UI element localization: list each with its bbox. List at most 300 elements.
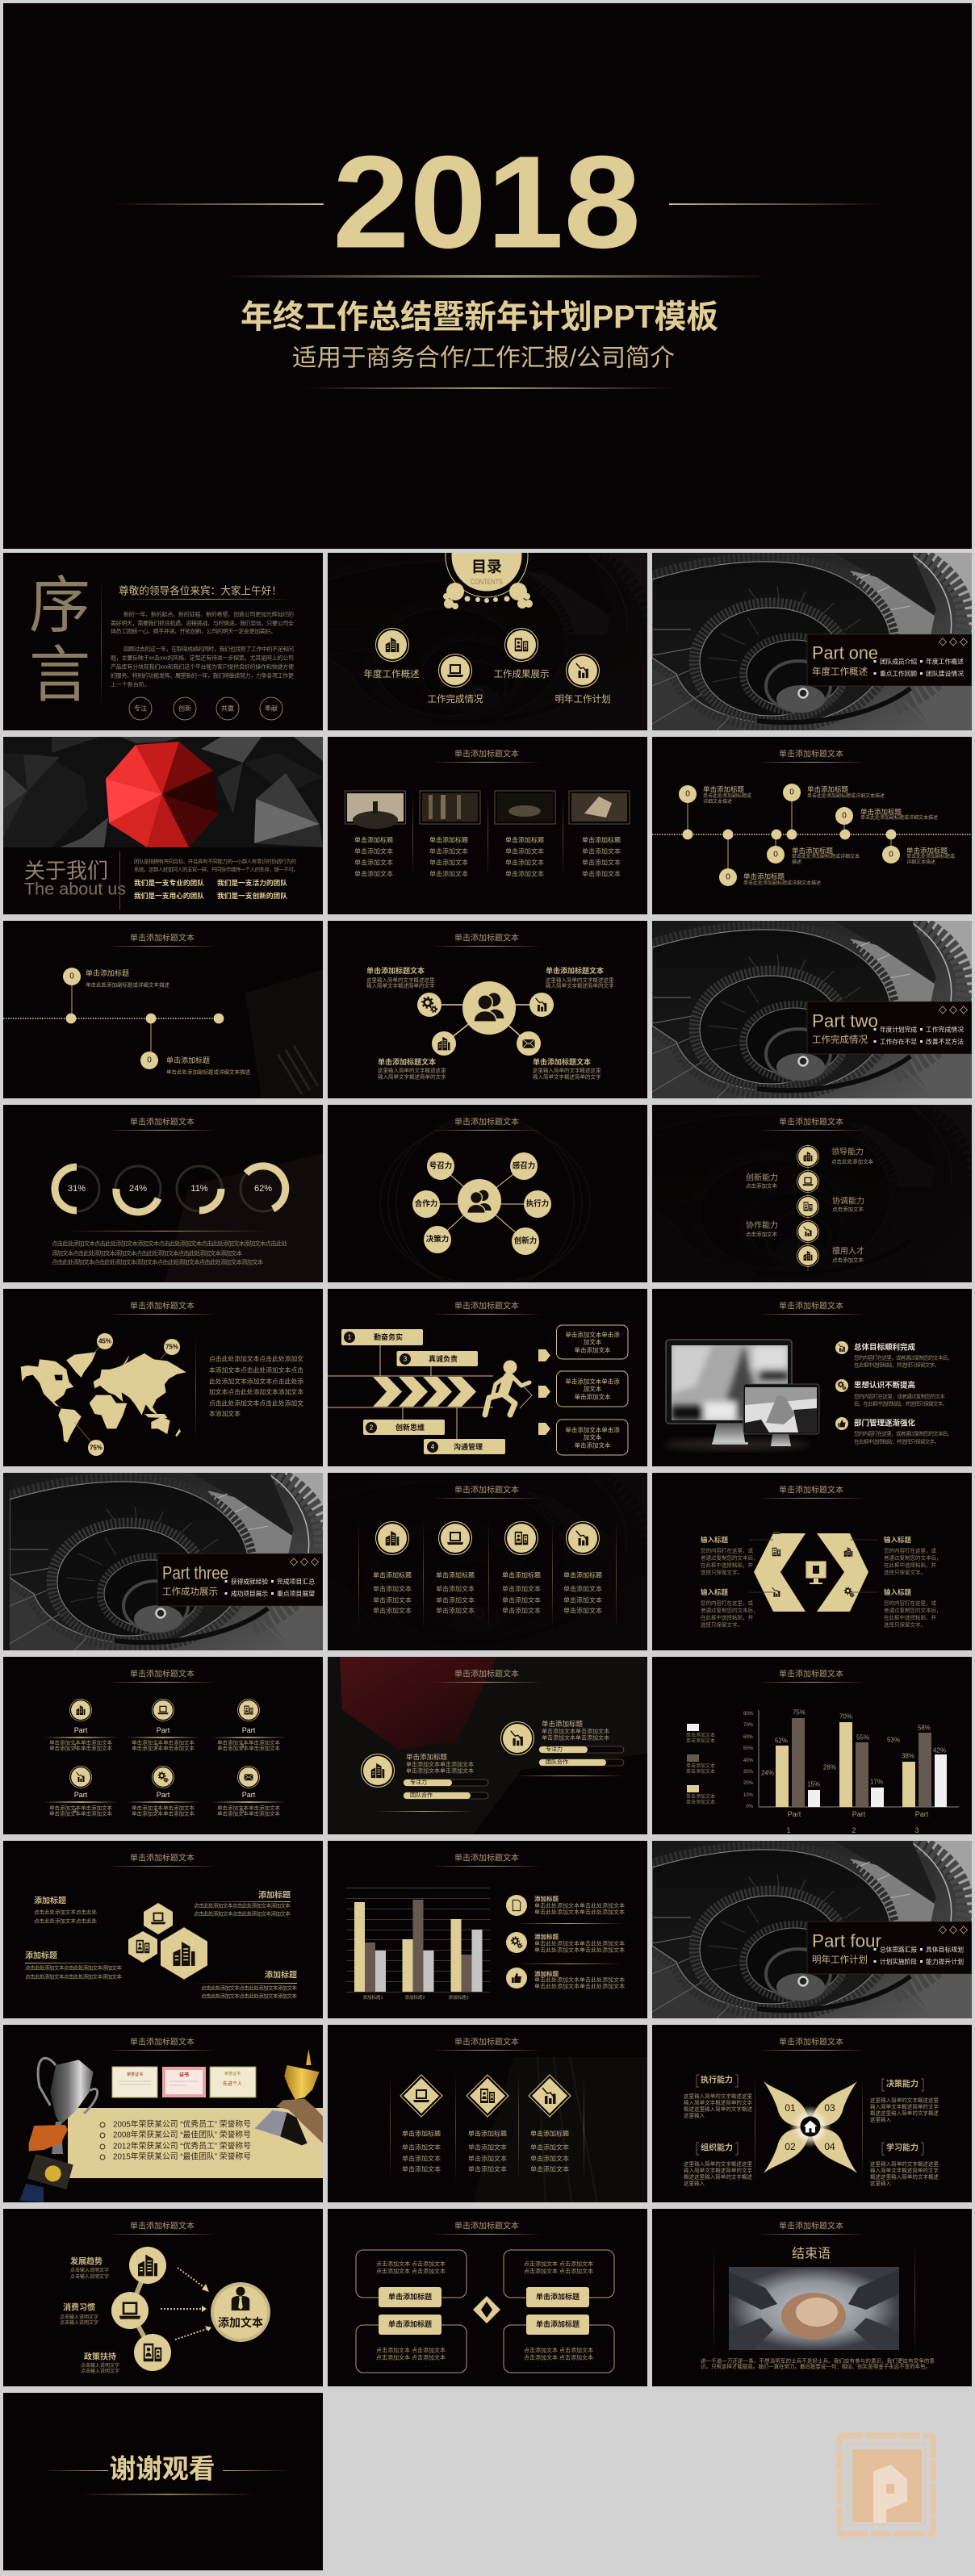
- section plate: 工作存在不足: [880, 1038, 917, 1046]
- title pills: [379, 2287, 589, 2335]
- labels: 单击添加标题文本: [378, 1057, 436, 1066]
- node badges: 0: [726, 873, 730, 881]
- section heading: 关于我们: [24, 859, 108, 883]
- item: 明年工作计划: 明年工作计划: [555, 693, 610, 705]
- title pills: 单击添加标题: [388, 2292, 432, 2301]
- heading: 单击添加标题文本: [779, 1117, 843, 1127]
- contents badge: [443, 515, 533, 609]
- ring 11%: [177, 1166, 222, 1211]
- chart: [346, 1888, 490, 1992]
- section plate: 计划实施阶段: [880, 1958, 917, 1966]
- ability labels: 点击添加文本: [746, 1181, 778, 1190]
- divider: [195, 1337, 196, 1442]
- preface text: 新的一年、新的起点、新的征程、新的希望。创造公司更加光辉灿烂的: [123, 610, 294, 618]
- left labels: 选择只保留文字。: [701, 1569, 743, 1575]
- value labels: 75%: [793, 1709, 806, 1716]
- title pills: 单击添加标题: [536, 2319, 580, 2328]
- map callouts: 75%: [165, 1343, 178, 1351]
- heading: 单击添加标题文本: [454, 933, 519, 943]
- title pills: 单击添加标题: [536, 2292, 580, 2301]
- section plate: 具体目标规划: [926, 1945, 964, 1953]
- heading: [107, 1117, 217, 1131]
- note 3: 单击此处添加文本单击此处添加文本: [534, 1976, 625, 1984]
- panel: about us: [3, 737, 323, 914]
- heading: 单击添加标题文本: [454, 1301, 519, 1311]
- factor labels: 点击输入说明文字: [70, 2273, 109, 2280]
- panel: vertical abilities: [652, 1105, 972, 1282]
- column text: 单击添加文本: [429, 870, 468, 878]
- legend: 单击添加文本: [686, 1793, 715, 1800]
- part text: 单击添加文本单击添加文本: [49, 1804, 113, 1811]
- right labels: 在此框中选择粘贴，并: [884, 1614, 936, 1620]
- ability names: 号召力: [429, 1160, 452, 1170]
- diamond icons: [400, 2075, 571, 2117]
- description: [209, 1354, 303, 1417]
- rule left: [44, 2470, 108, 2471]
- node labels: 单击此处添加副标题或详细文本描述: [743, 880, 821, 886]
- badge bottom: 单击此处添加副标题或详细文本描述: [166, 1068, 250, 1075]
- description: 点击此处添加文本点击此处添加文: [209, 1354, 303, 1362]
- right labels: 您的内容打在这里，或: [884, 1546, 936, 1554]
- arrows: [538, 1349, 550, 1435]
- teamwork photo: [729, 2267, 899, 2350]
- note 2: 单击此处添加文本单击此处添加文本: [534, 1947, 625, 1953]
- heading: 单击添加标题文本: [130, 2037, 195, 2047]
- column text: 单击添加文本: [582, 870, 621, 878]
- part text: 4: [73, 1808, 77, 1814]
- outcome boxes: 加文本: [584, 1385, 602, 1393]
- step pills: 勤奋务实: [374, 1332, 403, 1341]
- left labels: 在此框中选择粘贴，并: [701, 1561, 754, 1569]
- skill block right: 单击添加标题: [542, 1720, 584, 1728]
- monitor: [664, 1340, 810, 1451]
- panel: hexagons: [3, 1841, 323, 2018]
- spiral staircase photo: [10, 1463, 329, 1650]
- panel: bar chart with notes: [328, 1841, 647, 2018]
- ability names: [415, 1160, 549, 1246]
- node badges: 0: [685, 789, 690, 799]
- axes: 80%: [743, 1712, 754, 1717]
- heading: [107, 933, 217, 947]
- heading: 单击添加标题文本: [779, 749, 843, 759]
- label top right: 点击此处添加文本点击此处添加文本添加文本: [194, 1909, 291, 1917]
- preface text: 体员工团结一心、携手并进、开拓创新，公司的明天一定会更加美好。: [111, 628, 276, 634]
- part text: Part: [157, 1791, 170, 1799]
- award list: [100, 2119, 251, 2161]
- ability 学习能力: [870, 2142, 939, 2187]
- ability 学习能力: 输入简单文字概述简单的文字: [870, 2166, 939, 2174]
- red umbrella backdrop: [340, 1657, 497, 1750]
- box text: 点击添加文本 点击添加文本: [524, 2268, 593, 2274]
- part text: 3: [241, 1743, 245, 1750]
- ability names: 决策力: [426, 1235, 449, 1244]
- note 2: [506, 1932, 625, 1953]
- photo frames: [345, 791, 630, 829]
- node badges: 0: [789, 788, 794, 797]
- chevrons: [373, 1377, 476, 1407]
- item: 工作完成情况: [428, 654, 483, 705]
- factor labels: 消费习惯: [63, 2302, 95, 2313]
- note 1: 添加标题: [534, 1895, 559, 1903]
- feature list: [835, 1341, 952, 1445]
- feature list: 您的内容打在这里，或者通过复制您的文本后，: [854, 1354, 952, 1361]
- part text: 单击添加文本单击添加文本: [49, 1809, 113, 1817]
- part text: Part: [242, 1791, 256, 1799]
- category labels: 3: [914, 1826, 919, 1834]
- divider: [119, 851, 120, 910]
- petal numbers: 01: [785, 2102, 796, 2114]
- ring 11%: 11%: [190, 1184, 208, 1194]
- feature list: 思想认识不断提高: [854, 1380, 915, 1390]
- badges: [376, 1522, 599, 1554]
- heading: [432, 933, 542, 947]
- panel: world map: [3, 1289, 323, 1466]
- axes: 40%: [743, 1758, 754, 1763]
- badge top: [63, 968, 169, 988]
- heading: [756, 1669, 866, 1683]
- skill block right: [500, 1720, 624, 1766]
- panel: timeline six nodes: [652, 737, 972, 914]
- note 1: 单击此处添加文本单击此处添加文本: [534, 1908, 625, 1916]
- ring 24%: 24%: [129, 1184, 147, 1194]
- rules: [376, 1775, 626, 1812]
- panel: hexagon bands: [652, 1473, 972, 1650]
- linked circles: [111, 2247, 171, 2371]
- label top left: [34, 1895, 97, 1924]
- ability 组织能力: [684, 2142, 752, 2187]
- badge top: 单击添加标题: [86, 968, 129, 977]
- label bottom right: 点击此处添加文本点击此处添加文本添加文本: [201, 1984, 297, 1992]
- ability labels: 点击添加文本: [832, 1206, 864, 1212]
- ability 组织能力: 输入简单文字概述简单的文字: [684, 2166, 752, 2174]
- node labels: [703, 785, 955, 886]
- description: 点击此处添加文本点击此处添加文: [209, 1399, 303, 1407]
- column text: 单击添加文本: [436, 1585, 475, 1593]
- heading: [756, 2221, 866, 2235]
- factor labels: 点击输入说明文字: [60, 2319, 98, 2326]
- petal numbers: [785, 2102, 835, 2152]
- ring 31%: [54, 1166, 99, 1211]
- title: 2018: 2018: [333, 128, 641, 276]
- column text: 单击添加文本: [436, 1596, 475, 1604]
- silver trophy in hand: [19, 2058, 98, 2202]
- column text: 单击添加文本: [563, 1606, 602, 1614]
- petal flower: [764, 2081, 857, 2173]
- ability labels: 协调能力: [832, 1196, 864, 1206]
- map callouts: 45%: [98, 1338, 111, 1344]
- node labels: 单击此处添加副标题或: [906, 853, 955, 859]
- badge bottom: [140, 1052, 250, 1075]
- panel: runner process: [328, 1289, 647, 1466]
- value labels: 24%: [761, 1769, 774, 1777]
- column text: [373, 1570, 602, 1614]
- dividers: [358, 1521, 617, 1630]
- axes: 60%: [743, 1735, 754, 1740]
- factor labels: 政策扶持: [84, 2352, 116, 2361]
- left labels: 在此框中选择粘贴，并: [701, 1614, 754, 1620]
- bars: [776, 1718, 947, 1807]
- ability 学习能力: 概述这里输入简单的文字概述: [870, 2172, 939, 2181]
- preface text: 的服务、特别的功能发挥。展望新的一年，我们将继续努力，力争各项工作更: [111, 671, 294, 680]
- certificates: 荣誉证书: [224, 2071, 241, 2076]
- section plate: 团队成员介绍: [880, 657, 917, 665]
- chain badges: [797, 1145, 819, 1267]
- factor labels: [60, 2256, 119, 2374]
- labels: 单击添加标题文本: [546, 966, 604, 975]
- outcome boxes: 加文本: [584, 1433, 602, 1441]
- part text: 单击添加文本单击添加文本: [49, 1745, 113, 1751]
- column text: 单击添加文本: [502, 1606, 541, 1614]
- preface text: 题，主要反映于xx及xxx的风格、定型还有待进一步探索。尤其是网上的公司: [111, 654, 294, 662]
- world map: [21, 1352, 186, 1443]
- title pills: 单击添加标题: [388, 2319, 432, 2328]
- outcome boxes: [557, 1325, 628, 1455]
- preface text: [111, 610, 294, 688]
- label top right: 点击此处添加文本点击此处添加文本添加文本: [194, 1901, 291, 1909]
- value labels: 52%: [775, 1737, 788, 1745]
- note 3: 单击此处添加文本单击此处添加文本: [534, 1982, 625, 1990]
- column text: 单击添加文本: [354, 847, 393, 855]
- labels: [366, 966, 614, 1080]
- panel: awards: [3, 2025, 323, 2202]
- section plate: 工作完成情况: [812, 1034, 868, 1045]
- node labels: 单击添加标题: [703, 785, 745, 793]
- column text: 单击添加文本: [502, 1585, 541, 1593]
- column text: 单击添加标题: [468, 2129, 507, 2137]
- column text: 单击添加文本: [563, 1585, 602, 1593]
- ring 62%: [241, 1166, 286, 1211]
- column text: 单击添加标题: [582, 836, 621, 844]
- node labels: 单击此处添加副标题或详细文本: [792, 853, 860, 859]
- award list: 2015年荣获某公司 “最佳团队” 荣誉称号: [113, 2152, 251, 2161]
- heading: 单击添加标题文本: [454, 1853, 519, 1863]
- note 2: 单击此处添加文本单击此处添加文本: [534, 1940, 625, 1947]
- panel: devices: [652, 1289, 972, 1466]
- panel: progress rings: [3, 1105, 323, 1282]
- column text: [402, 2129, 569, 2172]
- section plate: Part four: [812, 1930, 881, 1951]
- dividers: [517, 1923, 622, 1964]
- part text: Part: [157, 1726, 170, 1734]
- node labels: 单击此处添加副标题或: [703, 792, 751, 799]
- about text: [134, 857, 299, 873]
- map callouts: [74, 1333, 180, 1456]
- spiral staircase photo: [652, 911, 972, 1098]
- part text: Part: [74, 1726, 88, 1734]
- outcome boxes: 单击添加文本单击添: [565, 1377, 620, 1385]
- panel: part one: [652, 553, 972, 730]
- axes: 10%: [743, 1793, 754, 1798]
- legend: 单击添加文本: [686, 1799, 715, 1805]
- left labels: 输入标题: [701, 1536, 729, 1544]
- column text: 单击添加标题: [429, 836, 468, 844]
- column text: 单击添加标题: [505, 836, 544, 844]
- node badges: 0: [842, 812, 847, 820]
- labels: 单击添加标题文本: [533, 1057, 591, 1066]
- node labels: 单击此处添加副标题或详细文本描述: [807, 792, 885, 799]
- panel: part four: [652, 1841, 972, 2018]
- heading: 单击添加标题文本: [779, 1669, 843, 1679]
- ability 决策能力: [870, 2079, 939, 2122]
- feature list: 在此框中选择粘贴，并选择只保留文字。: [854, 1361, 939, 1369]
- track lines and connectors: [328, 1345, 493, 1439]
- node labels: 单击添加标题: [792, 847, 834, 855]
- left labels: 者通过复制您的文本后，: [701, 1554, 759, 1561]
- runner figure: [485, 1361, 532, 1415]
- skill block left: 单击添加文本单击添加文本: [406, 1767, 474, 1774]
- feature list: 您的内容打在这里，或者通过复制您的文本: [854, 1393, 946, 1399]
- section plate: 成功项目展示: [231, 1590, 268, 1598]
- caption: [52, 1240, 287, 1265]
- outcome boxes: 单击添加文本: [575, 1393, 611, 1401]
- preface text: 美好明天，需要我们抓住机遇、迎接挑战、与时俱进。我们坚信，只要公司全: [111, 620, 294, 626]
- big heading 序言: [29, 571, 90, 710]
- node labels: 单击添加标题: [743, 872, 785, 880]
- feature list: 部门管理逐渐强化: [854, 1419, 916, 1428]
- certificates: 荣誉证书: [127, 2072, 143, 2077]
- category labels: [786, 1810, 929, 1834]
- ability labels: 点击添加文本: [832, 1256, 864, 1264]
- hub diagram: [417, 981, 554, 1056]
- node labels: 单击添加标题: [906, 847, 948, 855]
- stems and nodes: [683, 792, 896, 877]
- column text: 单击添加标题: [402, 2129, 441, 2137]
- badge bottom: 单击添加标题: [166, 1056, 210, 1064]
- skill block left: [362, 1753, 488, 1799]
- heading: [107, 2037, 217, 2051]
- column text: 单击添加文本: [468, 2155, 507, 2163]
- category labels: 添加标题1: [362, 1994, 383, 2001]
- column text: 单击添加文本: [505, 847, 544, 855]
- rule above main heading: [224, 275, 771, 278]
- big heading 序言: 序: [29, 571, 90, 641]
- section plate: 明年工作计划: [812, 1954, 868, 1965]
- panel: four badges: [328, 1473, 647, 1650]
- column text: 单击添加文本: [402, 2143, 441, 2152]
- section plate: Part three: [162, 1562, 228, 1583]
- label mid left: 添加标题: [25, 1950, 57, 1961]
- part text: 单击添加文本单击添加文本: [217, 1809, 281, 1817]
- team statements: [134, 878, 287, 900]
- section plate: 完成项目汇总: [277, 1577, 315, 1585]
- legend: 单击添加文本: [686, 1738, 715, 1744]
- step pills: 1: [348, 1333, 352, 1341]
- category labels: Part: [788, 1810, 801, 1818]
- ability labels: 协作能力: [746, 1220, 778, 1230]
- big heading 序言: 言: [29, 641, 90, 710]
- center monitor: [806, 1561, 826, 1584]
- divider: [101, 577, 102, 710]
- ability names: 创新力: [514, 1236, 537, 1246]
- closing text: [701, 2356, 935, 2369]
- umbrella photo: [3, 737, 323, 847]
- factor labels: 点击输入说明文字: [81, 2368, 119, 2374]
- heading: [107, 1301, 217, 1315]
- item: 工作完成情况: 工作完成情况: [428, 693, 483, 705]
- team statements: 我们是一支创新的团队: [217, 891, 287, 900]
- team statements: 我们是一支用心的团队: [134, 891, 204, 900]
- heading: [756, 1117, 866, 1131]
- icon: people: [467, 1190, 492, 1213]
- heading: [432, 2221, 542, 2235]
- panel: hub and spoke: [328, 921, 647, 1098]
- left labels: 输入标题: [701, 1588, 729, 1596]
- closing heading: 谢谢观看: [110, 2453, 215, 2484]
- value labels: 70%: [839, 1712, 852, 1721]
- value rings: [129, 697, 282, 720]
- value labels: 17%: [870, 1779, 883, 1785]
- chain: [807, 1144, 809, 1271]
- node badges: 0: [773, 851, 778, 859]
- column text: 单击添加文本: [582, 859, 621, 867]
- labels: 这里输入简单的文字概述这里: [366, 976, 435, 983]
- ability 学习能力: 学习能力: [886, 2142, 919, 2153]
- part text: 单击添加文本单击添加文本: [49, 1738, 113, 1746]
- right labels: 者通过复制您的文本后，: [884, 1606, 941, 1614]
- description: 加文本点击此处添加文本添加文本: [209, 1388, 303, 1396]
- node labels: 单击添加标题: [860, 808, 902, 816]
- description: 本添加文本: [209, 1409, 241, 1417]
- certificates: [112, 2067, 256, 2097]
- labels: 单击添加标题文本: [366, 966, 425, 975]
- column text: 单击添加文本: [530, 2155, 569, 2163]
- node labels: 单击此处添加副标题或详细文本描述: [860, 814, 938, 821]
- skill block right: 团队合作: [546, 1758, 568, 1766]
- part text: Part: [74, 1791, 88, 1799]
- labels: 这里输入简单的文字概述这里: [533, 1067, 601, 1073]
- section plate: 改善不足方法: [926, 1038, 964, 1046]
- heading: [432, 1117, 542, 1131]
- column text: 单击添加文本: [505, 859, 544, 867]
- section heading: The about us: [24, 880, 126, 899]
- petal numbers: 03: [824, 2102, 835, 2114]
- rules: [44, 1737, 286, 1803]
- heading: 单击添加标题文本: [454, 1669, 519, 1679]
- section plate: 工作成功展示: [162, 1587, 218, 1597]
- part text: 2: [155, 1743, 159, 1750]
- left labels: 您的内容打在这里，或: [701, 1600, 754, 1606]
- dotted arrows: [161, 2268, 211, 2340]
- factor labels: 点击输入说明文字: [81, 2362, 119, 2369]
- box text: 点击添加文本 点击添加文本: [376, 2260, 446, 2268]
- ability 学习能力: 这里输入简单的文字概述这里: [870, 2160, 939, 2168]
- column dividers: [412, 793, 563, 878]
- spiral staircase photo: [652, 543, 972, 730]
- center glow and home icon: [789, 2106, 831, 2147]
- rule below subheading: [304, 387, 676, 389]
- part text: 单击添加文本单击添加文本: [132, 1809, 195, 1817]
- axes: 70%: [743, 1723, 754, 1728]
- hub icons: [422, 993, 546, 1050]
- description: 此处添加文本添加文本点击此处添: [209, 1377, 303, 1385]
- column text: 单击添加文本: [468, 2164, 507, 2172]
- section plate: [807, 1922, 972, 1974]
- panel: thank you: [3, 2393, 323, 2570]
- section plate: 团队建设情况: [926, 670, 964, 678]
- ability 决策能力: 决策能力: [886, 2079, 919, 2089]
- value labels: 15%: [807, 1780, 820, 1788]
- column text: [354, 836, 621, 878]
- ability 决策能力: 输入简单文字概述简单的文字: [870, 2103, 939, 2110]
- heading: 单击添加标题文本: [130, 933, 195, 943]
- panel: three inputs: [3, 2209, 323, 2386]
- heading: [432, 1485, 542, 1499]
- labels: 这里输入简单的文字概述这里: [378, 1067, 446, 1073]
- factor labels: 发展趋势: [70, 2256, 103, 2266]
- heading: [107, 1853, 217, 1867]
- item: 工作成果展示: [494, 628, 549, 680]
- step pills: [341, 1329, 505, 1454]
